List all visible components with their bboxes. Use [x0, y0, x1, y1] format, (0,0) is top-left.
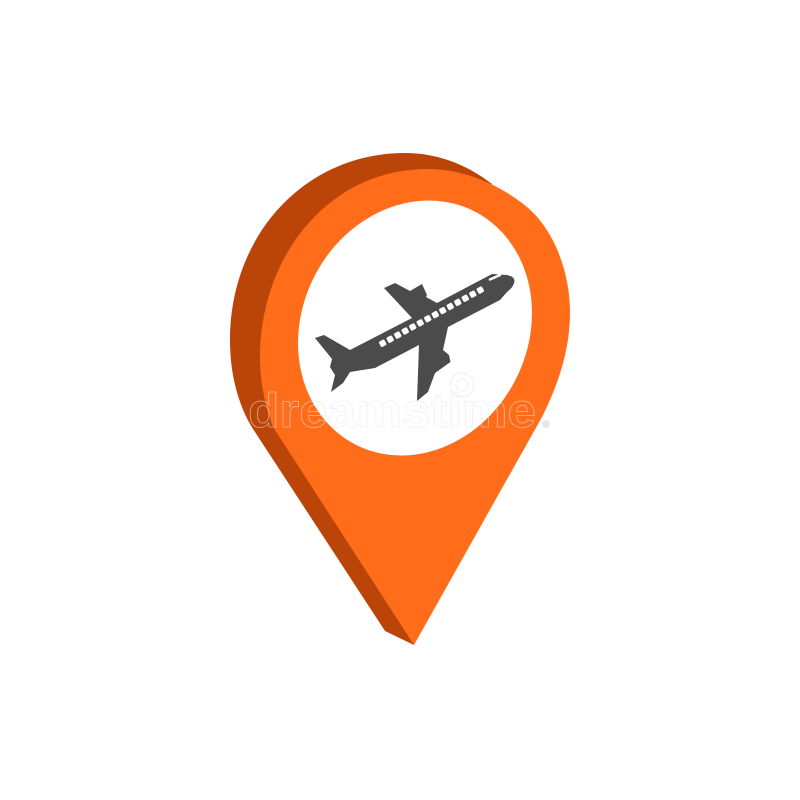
white circle: [255, 160, 575, 496]
watermark registered mark: [542, 420, 550, 428]
pin side (3D depth): [230, 153, 492, 645]
pin front face: [260, 169, 570, 645]
cockpit window: [490, 275, 500, 280]
watermark: [248, 373, 550, 438]
watermark spiral: [450, 373, 474, 397]
watermark wordmark: dreamstime: [248, 385, 536, 438]
cabin windows: [378, 286, 484, 348]
map pin: [230, 153, 575, 645]
airplane body: [315, 274, 514, 401]
icon: airplane: [315, 274, 514, 401]
